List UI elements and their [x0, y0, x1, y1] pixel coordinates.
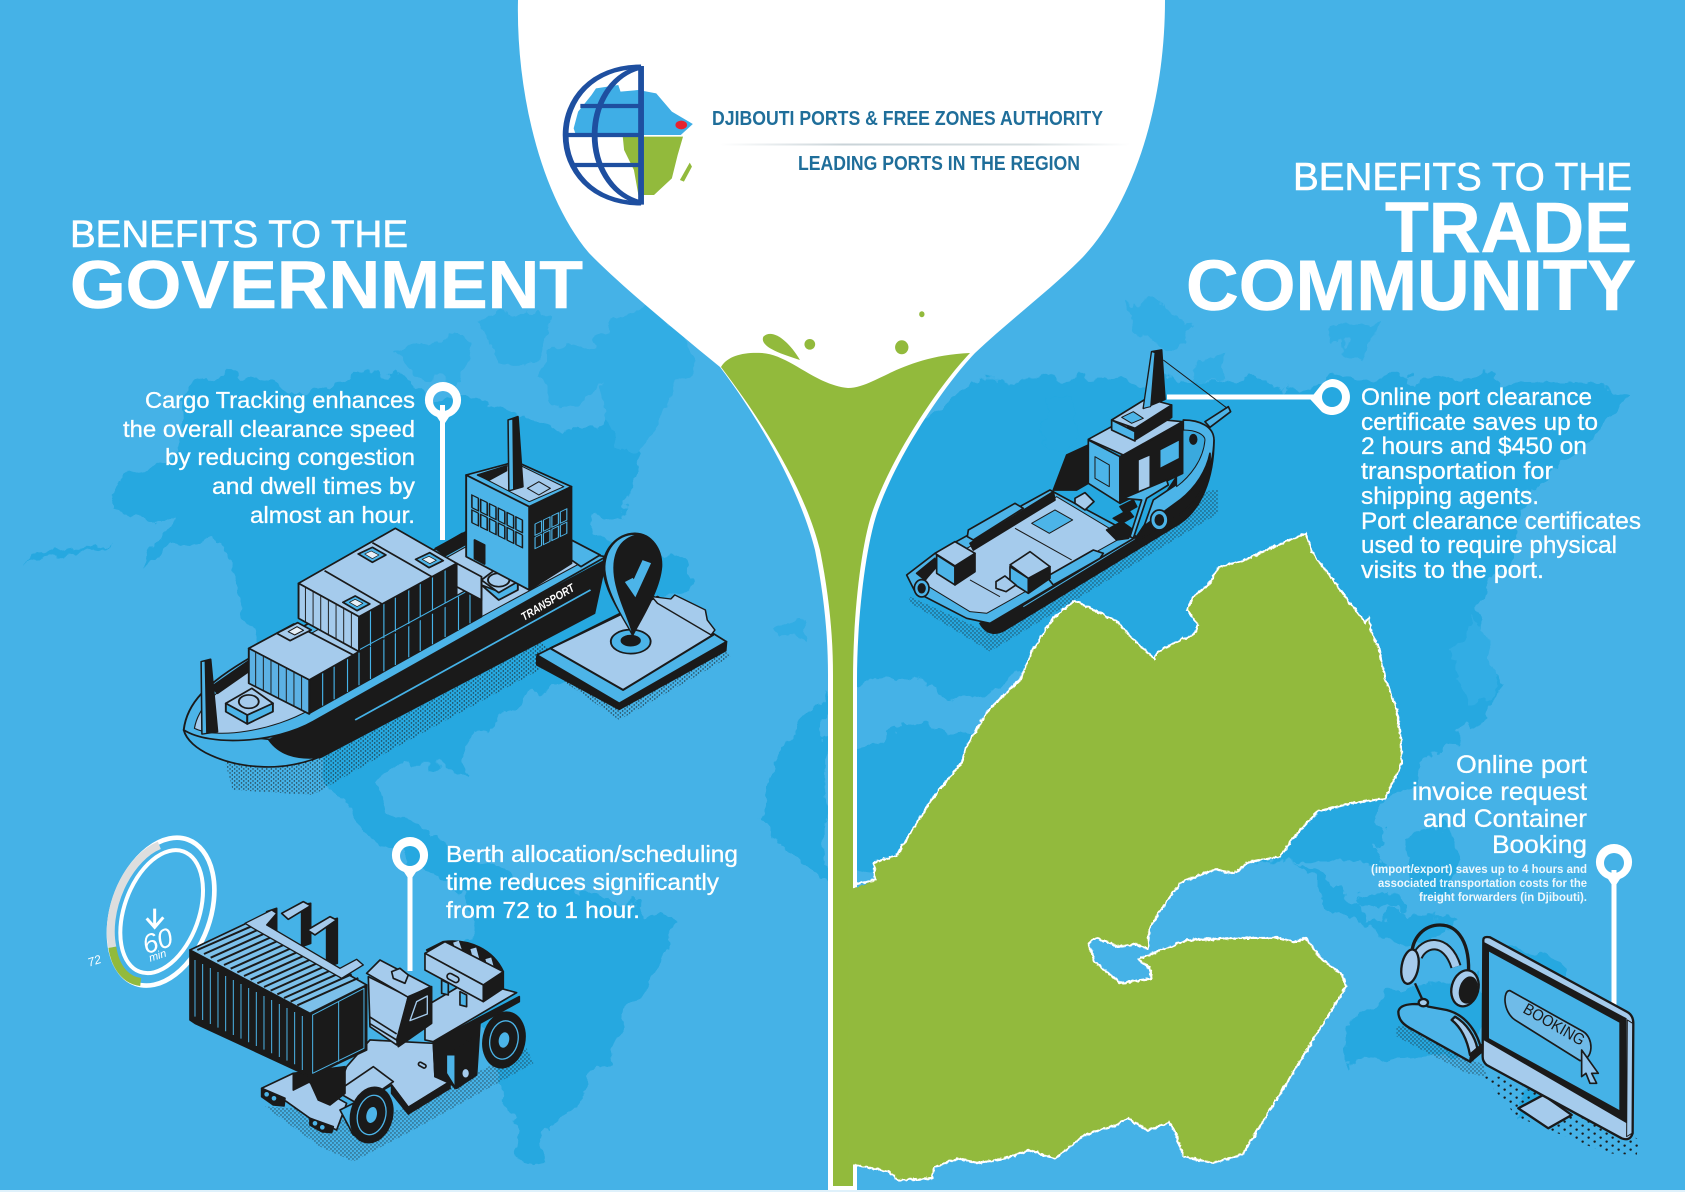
text: online port invoice request: invoice request: [1412, 778, 1587, 806]
bow: [1133, 420, 1214, 543]
bow winch box: [226, 688, 273, 724]
chassis: [262, 980, 519, 1130]
text: online port clearance: transportation for: [1361, 458, 1553, 485]
halftone shadow: [1397, 1027, 1487, 1077]
logo title: DJIBOUTI PORTS & FREE ZONES AUTHORITY: [712, 108, 1104, 130]
gauge start value: 72: [86, 952, 103, 970]
clipboard: [537, 595, 726, 709]
text: online port clearance: shipping agents.: [1361, 483, 1539, 510]
text: berth allocation: Berth allocation/scheduling: [446, 841, 738, 867]
mid deck block and winch: [457, 563, 518, 600]
cabin: [367, 960, 432, 1047]
heading: benefits to the government: GOVERNMENT: [70, 247, 583, 323]
heading: benefits to the trade community: BENEFITS TO THE: [1293, 156, 1632, 199]
logo: globe and Africa: [566, 66, 693, 205]
text: online port clearance: 2 hours and $450 on: [1361, 433, 1587, 460]
logo divider: [720, 144, 1130, 146]
pin marker: online port clearance: [1167, 379, 1350, 415]
bottom edge: [0, 1190, 1685, 1192]
pin marker: berth allocation: [392, 837, 428, 971]
text: online port clearance: Online port clearance: [1361, 384, 1592, 411]
heading: benefits to the government: BENEFITS TO THE: [70, 214, 408, 256]
text: cargo tracking: Cargo Tracking enhances: [145, 387, 415, 413]
gauge unit: min: [147, 948, 168, 965]
halftone shadow: [225, 642, 730, 795]
text: online port invoice request: Online port: [1456, 751, 1587, 779]
gauge ring: [90, 823, 234, 1000]
illustration: tugboat: [907, 350, 1231, 652]
text: invoice request details: (import/export) saves up to 4 hours and: [1371, 864, 1587, 876]
text: berth allocation: time reduces significantly: [446, 869, 719, 895]
deck side guard: [1123, 480, 1168, 538]
deck crates: [935, 493, 1094, 593]
hull: [184, 532, 606, 767]
halftone shadow: [265, 1048, 533, 1162]
text: online port clearance: visits to the port.: [1361, 557, 1544, 584]
text: online port clearance: used to require physical: [1361, 532, 1617, 559]
text: invoice request details: [1371, 864, 1587, 904]
text: cargo tracking: and dwell times by: [212, 473, 415, 499]
monitor: [1483, 937, 1633, 1139]
bowsprit and stay: [1163, 360, 1231, 427]
front wheel: [340, 1083, 398, 1147]
mast forks: [267, 902, 337, 967]
mast: [1143, 350, 1165, 408]
upper container stack: [299, 528, 481, 652]
down arrow: [147, 909, 163, 927]
text: cargo tracking: almost an hour.: [250, 502, 415, 528]
gauge value: 60: [139, 922, 176, 960]
fork column under container: [293, 1067, 345, 1105]
text: online port invoice request: and Container: [1423, 805, 1587, 833]
world map: left half: [16, 297, 828, 1170]
monitor stand: [1518, 1095, 1572, 1128]
ship name label: TRANSPORT: [519, 582, 578, 624]
cabin: [1088, 398, 1183, 503]
map of Djibouti: [848, 533, 1402, 1180]
text: online port clearance: certificate saves up to: [1361, 409, 1598, 436]
lower container stack: [249, 582, 481, 714]
heading: benefits to the trade community: COMMUNITY: [1186, 247, 1636, 326]
far bulwark: [1053, 445, 1088, 490]
rear wheel: [478, 1008, 530, 1072]
location pin with check: [603, 533, 661, 654]
text: invoice request details: associated transportation costs for the: [1378, 878, 1587, 890]
bow mast: [201, 659, 217, 734]
text: online port invoice request: Booking: [1492, 831, 1587, 859]
world map: right half: [850, 303, 1627, 1112]
timer gauge: 72 to 60 min: [90, 823, 234, 1000]
heading: benefits to the trade community: TRADE: [1385, 189, 1632, 268]
illustration: container ship with location pin: [184, 417, 730, 795]
text: online port clearance: Port clearance certificates: [1361, 508, 1641, 535]
text: cargo tracking: the overall clearance speed: [123, 416, 415, 442]
stairs: [1107, 500, 1137, 540]
text: berth allocation: [446, 841, 738, 923]
cursor: [1582, 1050, 1598, 1083]
logo tagline: LEADING PORTS IN THE REGION: [798, 153, 1080, 175]
shipping container: [190, 910, 367, 1077]
splash droplets: [763, 311, 925, 360]
hull: [907, 440, 1214, 633]
counterweight: [425, 941, 503, 1007]
text: cargo tracking: by reducing congestion: [165, 444, 415, 470]
halftone shadow: [908, 490, 1218, 652]
text: online port clearance: [1361, 384, 1641, 584]
heading: benefits to the trade community: [1186, 156, 1636, 326]
illustration: container handler truck: [190, 902, 533, 1162]
white funnel with stem outline: [518, 0, 1165, 1190]
text: invoice request details: freight forwarders (in Djibouti).: [1419, 892, 1587, 904]
superstructure: [466, 417, 571, 590]
illustration: headset and booking monitor: [1397, 925, 1640, 1155]
pin marker: cargo tracking: [425, 382, 461, 540]
booking button label: BOOKING: [1520, 1001, 1587, 1049]
pin marker: online port invoice: [1596, 844, 1632, 1005]
tail lights: [262, 1088, 333, 1133]
text: berth allocation: from 72 to 1 hour.: [446, 897, 640, 923]
green liquid stem with splash: [721, 311, 970, 1186]
heading: benefits to the government: [70, 214, 583, 323]
operator bust with headset: [1398, 925, 1483, 1062]
booking button: [1505, 991, 1591, 1061]
text: cargo tracking: [123, 387, 415, 528]
text: online port invoice request: [1412, 751, 1587, 859]
